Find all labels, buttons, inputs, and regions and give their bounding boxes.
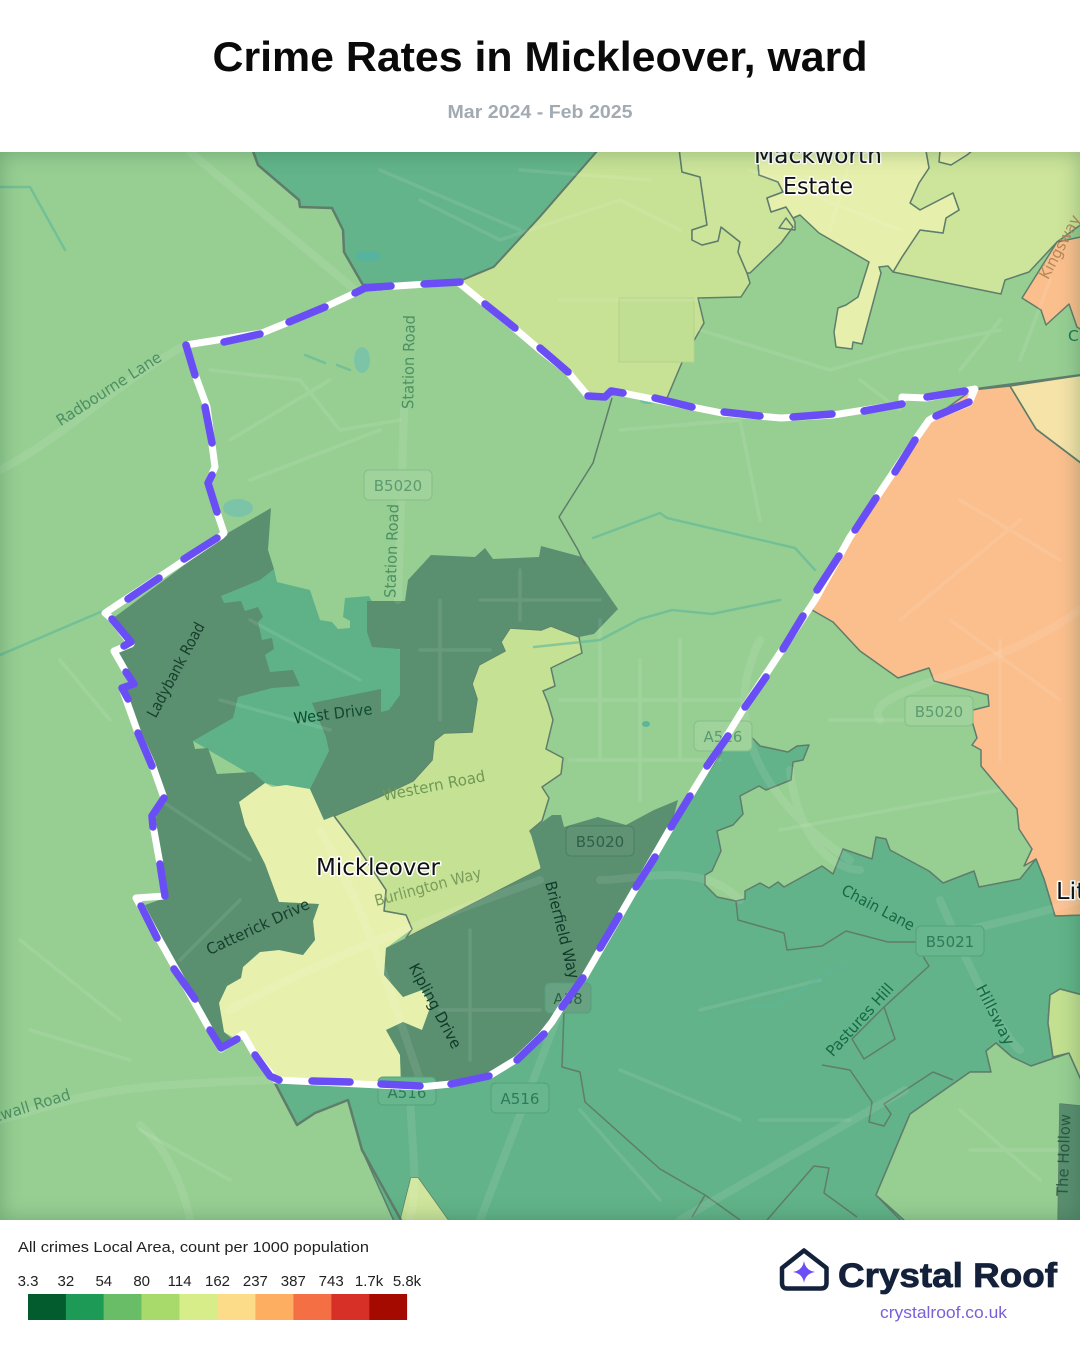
area: Mackworth pale yellow (757, 152, 972, 350)
area: north centre lime (678, 140, 795, 273)
area: Mickleover centre pale yellow (219, 783, 431, 1085)
label: Station Road north: Station Road (399, 315, 419, 409)
area: west dark green (112, 508, 319, 1049)
legend value labels: 5.8k (393, 1273, 422, 1290)
legend value labels (18, 1273, 422, 1290)
area: central green (193, 569, 400, 800)
legend value labels: 32 (58, 1273, 74, 1290)
legend title: All crimes Local Area, count per 1000 population (18, 1239, 369, 1256)
place labels (316, 143, 1080, 905)
area: north-east lime (893, 140, 1080, 294)
label: Catterick Drive: Catterick Drive (203, 895, 313, 959)
roads (0, 152, 1080, 1220)
area: The Hollow dark (1058, 1104, 1080, 1230)
shield: A516 south west (378, 1077, 436, 1105)
legend value labels: 162 (205, 1273, 230, 1290)
label: Station Road south: Station Road (381, 504, 403, 598)
area: pale peach corner (1010, 374, 1080, 470)
legend value labels: 80 (133, 1273, 150, 1290)
logo wordmark: Crystal Roof (838, 1257, 1058, 1295)
logo website: crystalroof.co.uk (880, 1303, 1008, 1322)
label: Western Road: Western Road (381, 767, 487, 805)
legend value labels: 387 (281, 1273, 306, 1290)
shield: A516 south: A516 (501, 1090, 539, 1108)
label: The Hollow: The Hollow (1054, 1113, 1074, 1197)
subtitle: date range: Mar 2024 - Feb 2025 (448, 101, 632, 122)
area: south dark green (384, 800, 678, 1085)
label: Estate: Estate (783, 174, 853, 200)
label: Chain Lane: Chain Lane (838, 881, 918, 935)
ward outline purple dashes (112, 282, 969, 1086)
boundaries between areas (275, 298, 1080, 1220)
shield: A516 south west: A516 (388, 1084, 426, 1102)
shield: B5020 north (364, 470, 432, 500)
shield: A38 (545, 983, 591, 1013)
logo: Crystal Roof (782, 1250, 1058, 1322)
shield: B5020 east (905, 696, 973, 726)
shield: B5020 dark (566, 826, 634, 856)
legend value labels: 1.7k (355, 1273, 384, 1290)
area: west lime (458, 140, 750, 398)
shield: A516 south (491, 1083, 549, 1113)
legend value labels: 743 (319, 1273, 344, 1290)
area: north green (252, 152, 596, 286)
shield: A516: A516 (704, 728, 742, 746)
label: Mickleover: Mickleover (316, 855, 441, 881)
road shields (364, 470, 984, 1113)
legend value labels: 3.3 (18, 1273, 38, 1290)
shield: A38: A38 (553, 990, 583, 1008)
area: Kingsway orange (1022, 235, 1080, 335)
area: large orange east (812, 386, 1080, 916)
ward boundary (105, 282, 975, 1087)
area: south-east green (275, 725, 1080, 1230)
area: south lime notch (401, 1178, 448, 1220)
shield: B5020 dark: B5020 (576, 833, 624, 851)
icon: house outline with star (782, 1250, 826, 1288)
area: centre dark green (310, 546, 618, 820)
ward outline white (105, 282, 975, 1087)
label: West Drive: West Drive (293, 700, 373, 728)
label: Pastures Hill: Pastures Hill (823, 980, 897, 1060)
shield: B5020 east: B5020 (915, 703, 963, 721)
label: Mackworth: Mackworth (754, 143, 882, 169)
area: SE lime (1047, 988, 1080, 1080)
road labels (0, 212, 1080, 1197)
legend value labels: 54 (95, 1273, 112, 1290)
label: Radbourne Lane: Radbourne Lane (53, 348, 165, 430)
area: central lime (334, 626, 582, 938)
label: Hillsway: Hillsway (972, 982, 1018, 1048)
legend colour scale (28, 1294, 407, 1320)
label: Brierfield Way: Brierfield Way (541, 879, 583, 981)
shield: A516 (694, 721, 752, 751)
legend value labels: 114 (168, 1273, 192, 1290)
area: SE light green (876, 1043, 1080, 1230)
shield: B5021 (916, 926, 984, 956)
legend (18, 1239, 422, 1320)
label: Kipling Drive: Kipling Drive (405, 960, 465, 1052)
shield: B5021: B5021 (926, 933, 974, 951)
shield: B5020 north: B5020 (374, 477, 422, 495)
water features (0, 187, 845, 1007)
label: Ladybank Road: Ladybank Road (143, 619, 209, 721)
label: Burlington Way: Burlington Way (373, 864, 483, 910)
title: Crime Rates in Mickleover, ward (212, 33, 868, 80)
legend value labels: 237 (243, 1273, 268, 1290)
